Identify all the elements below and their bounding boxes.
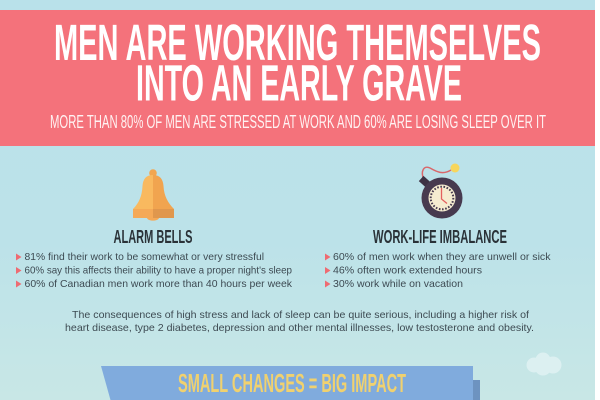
consequences paragraph (65, 309, 534, 334)
bullet list: alarm bells (16, 251, 293, 290)
bullet list: work-life imbalance: 30% work while on vacation (333, 278, 463, 290)
icon: bomb clock (419, 164, 462, 218)
bullet list: alarm bells: 60% of Canadian men work more than 40 hours per week (24, 278, 293, 290)
bullet list: work-life imbalance: 46% often work extended hours (333, 264, 482, 276)
icon: bell (133, 169, 174, 221)
ribbon banner: small changes (101, 366, 480, 400)
icon: cloud (526, 352, 562, 376)
ribbon heading: SMALL CHANGES = BIG IMPACT (178, 368, 406, 398)
bullet list: alarm bells: 60% say this affects their ability to have a proper night's sleep (24, 264, 292, 276)
panel: alarm bells (16, 169, 293, 290)
bullet list: work-life imbalance (325, 251, 551, 290)
panel: work-life imbalance (325, 164, 551, 290)
heading: work-life imbalance: WORK-LIFE IMBALANCE (373, 226, 507, 247)
header banner (0, 10, 595, 146)
bullet list: alarm bells: 81% find their work to be somewhat or very stressful (24, 251, 264, 263)
bullet list: work-life imbalance: 60% of men work when they are unwell or sick (333, 251, 551, 263)
consequences paragraph: The consequences of high stress and lack of sleep can be quite serious, including a higher risk of (72, 309, 529, 321)
heading: alarm bells: ALARM BELLS (114, 226, 192, 247)
consequences paragraph: heart disease, type 2 diabetes, depression and other mental illnesses, low testosterone and obesity. (65, 322, 534, 334)
title (54, 14, 541, 112)
